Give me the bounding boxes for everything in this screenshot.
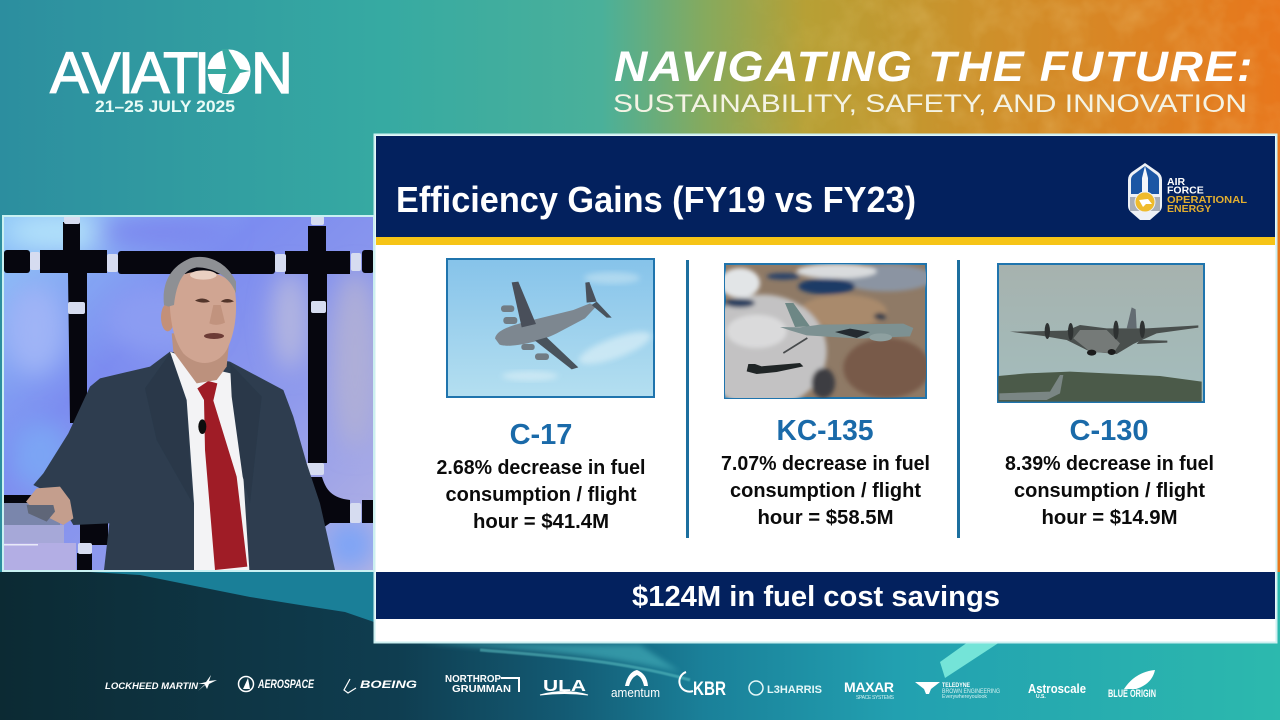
stat text: 2.68% decrease in fuel bbox=[436, 457, 646, 479]
logo: Northrop Grumman: NORTHROP bbox=[445, 673, 501, 685]
theme line 1: NAVIGATING THE FUTURE: bbox=[614, 43, 1254, 91]
icon: plane in the O bbox=[207, 49, 250, 93]
logo: Blue Origin bbox=[1108, 670, 1156, 700]
remote bbox=[27, 505, 55, 522]
divider bbox=[686, 260, 689, 538]
logo: Blue Origin: BLUE ORIGIN bbox=[1108, 688, 1156, 700]
stat text: hour = $41.4M bbox=[473, 511, 609, 533]
logo: Boeing: BOEING bbox=[360, 679, 418, 691]
logo: ULA bbox=[540, 678, 588, 695]
logo: KBR: KBR bbox=[693, 679, 726, 700]
tie bbox=[197, 381, 247, 570]
stat text: hour = $14.9M bbox=[1042, 507, 1178, 529]
hair bbox=[164, 257, 236, 307]
stage truss bbox=[4, 222, 374, 571]
theme line 2: SUSTAINABILITY, SAFETY, AND INNOVATION bbox=[613, 90, 1247, 118]
panel: speaker video bbox=[2, 212, 380, 572]
mouth bbox=[204, 333, 224, 339]
logo: KBR bbox=[679, 672, 726, 700]
stat text bbox=[721, 453, 930, 529]
logo text: AIR bbox=[1167, 176, 1186, 188]
logo: Aerospace bbox=[238, 676, 314, 692]
logo: L3Harris bbox=[749, 681, 822, 696]
face bbox=[170, 271, 236, 363]
stat text: consumption / flight bbox=[1014, 480, 1205, 502]
stat text: 8.39% decrease in fuel bbox=[1005, 453, 1214, 475]
logo: L3Harris: L3HARRIS bbox=[767, 684, 822, 696]
divider bbox=[957, 260, 960, 538]
stat text: consumption / flight bbox=[730, 480, 921, 502]
savings banner: $124M in fuel cost savings bbox=[632, 581, 1000, 613]
logo: Lockheed Martin: LOCKHEED MARTIN bbox=[105, 681, 199, 692]
stage lighting bbox=[5, 212, 380, 570]
microphone bbox=[198, 419, 206, 434]
logo: Teledyne Brown Engineering: TELEDYNE bbox=[942, 682, 971, 689]
stat text: hour = $58.5M bbox=[758, 507, 894, 529]
logo: Amentum bbox=[611, 670, 660, 700]
slide title: Efficiency Gains (FY19 vs FY23) bbox=[396, 179, 916, 220]
ear bbox=[161, 303, 174, 331]
photo: KC-135 refuelling bbox=[724, 263, 927, 399]
logo: Astroscale: Astroscale bbox=[1028, 681, 1086, 696]
shield bbox=[1128, 163, 1162, 220]
logo: Teledyne Brown Engineering: Everywhereyoulook bbox=[942, 694, 988, 700]
logo: Astroscale: U.S. bbox=[1036, 694, 1046, 700]
aircraft name: KC-135 bbox=[776, 415, 874, 447]
logo text bbox=[1167, 176, 1248, 215]
conference logo: AVIATION bbox=[50, 41, 293, 116]
conference theme heading bbox=[613, 43, 1254, 118]
shirt bbox=[170, 352, 249, 570]
logo: Teledyne Brown Engineering: BROWN ENGINEERING bbox=[942, 689, 1000, 695]
sponsor logos bbox=[105, 670, 1156, 701]
stat text bbox=[1005, 453, 1214, 529]
logo: Teledyne Brown Engineering bbox=[915, 682, 1000, 700]
photo: C-17 in flight bbox=[447, 259, 654, 397]
stat text: 7.07% decrease in fuel bbox=[721, 453, 930, 475]
terrain and clouds bbox=[725, 264, 926, 398]
podium bbox=[4, 503, 76, 571]
icon: Air Force Operational Energy logo bbox=[1128, 163, 1248, 220]
logo: Northrop Grumman bbox=[445, 673, 520, 695]
column: C-17 bbox=[436, 259, 654, 533]
logo: Lockheed Martin bbox=[105, 675, 217, 692]
hand bbox=[26, 487, 73, 525]
logo: Maxar: SPACE SYSTEMS bbox=[856, 695, 895, 701]
logo: Maxar: MAXAR bbox=[844, 679, 894, 695]
logo: Aerospace: AEROSPACE bbox=[257, 679, 314, 691]
photo: C-130 taking off bbox=[998, 264, 1204, 402]
forehead highlight bbox=[190, 270, 217, 280]
date: 21–25 JULY 2025 bbox=[95, 97, 235, 116]
gold rule bbox=[376, 237, 1275, 245]
speaker bbox=[26, 257, 335, 570]
logo text: ENERGY bbox=[1167, 203, 1211, 215]
stat text bbox=[436, 457, 646, 533]
aircraft name: C-130 bbox=[1070, 415, 1148, 447]
savings banner bbox=[376, 572, 1275, 619]
truss connectors bbox=[30, 216, 361, 554]
column: KC-135 bbox=[722, 263, 929, 526]
jacket bbox=[33, 352, 335, 570]
wordmark: AVIATION bbox=[50, 41, 293, 106]
lapel shadow bbox=[230, 373, 244, 482]
neck bbox=[172, 333, 230, 383]
slide header band bbox=[376, 136, 1275, 245]
column: C-130 bbox=[998, 264, 1214, 529]
stat text: consumption / flight bbox=[446, 484, 637, 506]
logo: Boeing bbox=[344, 679, 418, 693]
aircraft name: C-17 bbox=[510, 419, 572, 451]
logo: ULA: ULA bbox=[543, 678, 587, 695]
nose bbox=[209, 305, 225, 325]
logo text: FORCE bbox=[1167, 184, 1204, 196]
tanker and fighter bbox=[747, 303, 913, 374]
logo: Northrop Grumman: GRUMMAN bbox=[452, 683, 511, 695]
eyes bbox=[195, 299, 234, 303]
panel: slide bbox=[374, 134, 1276, 642]
logo: Amentum: amentum bbox=[611, 685, 660, 700]
logo text: OPERATIONAL bbox=[1167, 194, 1248, 206]
